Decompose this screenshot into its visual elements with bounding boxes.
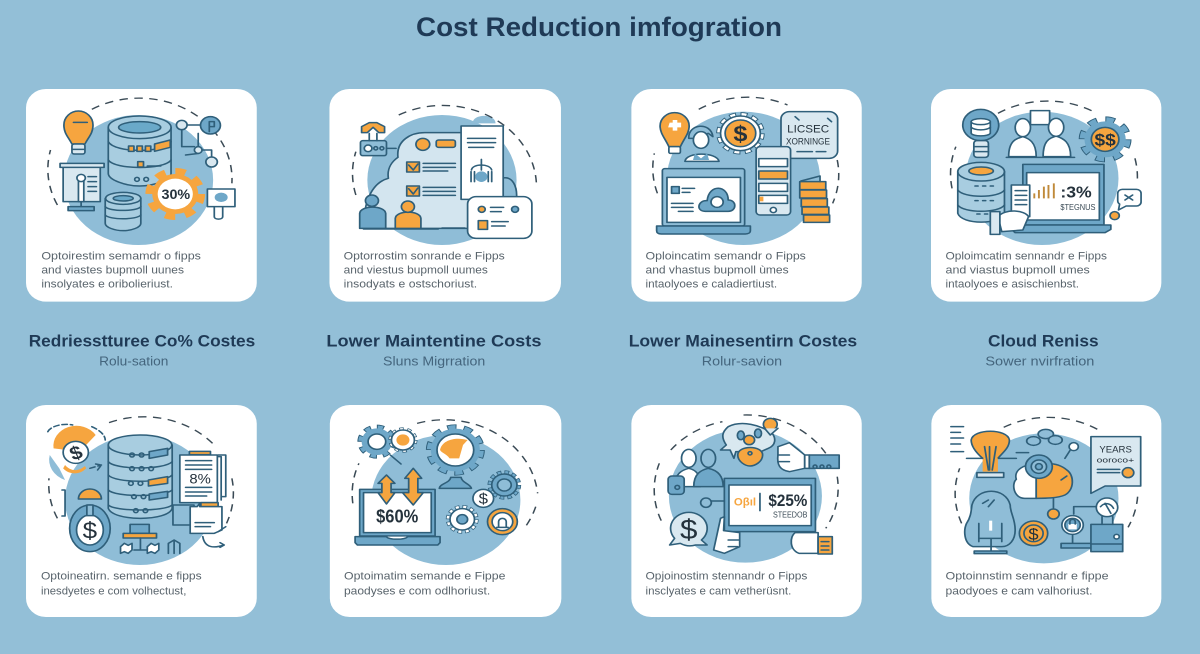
- text block: [344, 249, 505, 290]
- subheading: card 4: Sower nvirfration: [985, 353, 1094, 368]
- text block: [646, 249, 806, 290]
- icon: license sign: LICSEC: [787, 122, 830, 135]
- icon: license sign: XORNINGE: [786, 137, 830, 147]
- icon: database: [108, 435, 172, 518]
- icon: database bulb: [963, 109, 999, 157]
- icon: gear 30%: [150, 172, 201, 216]
- icon: orange gear: [390, 429, 415, 464]
- text block: and viastus bupmoll umes: [946, 263, 1090, 276]
- heading: card 1: Redriesstturee Co% Costes: [29, 331, 255, 350]
- text block: [41, 569, 202, 597]
- icon: sign post: [207, 189, 235, 219]
- text block: and viastes bupmoll uunes: [41, 263, 184, 276]
- icon: hand with paper: [990, 185, 1030, 234]
- icon: head on stand: [965, 491, 1015, 554]
- headings row: left: [29, 331, 541, 368]
- icon: two people: [1006, 111, 1074, 157]
- icon: database: [108, 116, 171, 186]
- panel: card 7 monitor $25%: [631, 405, 862, 617]
- text block: insclyates e cam vetherüsnt.: [646, 584, 791, 597]
- icon: text lines: [951, 427, 964, 452]
- icon: robot: [360, 123, 396, 156]
- icon: speech head: [721, 418, 778, 466]
- text block: intaolyoes e caladiertiust.: [646, 277, 777, 290]
- icon: blue gear: [361, 428, 393, 456]
- text block: Optoirestim semamdr o fipps: [41, 249, 201, 262]
- icon: speech note: YEARS: [1099, 445, 1132, 455]
- text block: paodyses e com odlhoriust.: [344, 584, 490, 597]
- text block: Optorrostim sonrande e Fipps: [344, 249, 505, 262]
- icon: large gear on stand: [429, 427, 481, 488]
- icon: laptop $60%: $60%: [376, 507, 418, 527]
- panel: card 6 gears and laptop: [330, 405, 561, 617]
- icon: monitor $25%: $25%: [768, 491, 807, 510]
- icon: monitor $25%: Oβıl: [734, 497, 756, 508]
- text block: and viestus bupmoll uumes: [344, 263, 488, 276]
- text block: insolyates e oribolieriust.: [41, 277, 173, 290]
- text block: Optoinnstim sennandr e fippe: [946, 569, 1109, 582]
- icon: disk stack: [105, 192, 141, 231]
- icon: orange arrows: [378, 468, 423, 505]
- icon: people: [360, 195, 465, 229]
- text block: inesdyetes e com volhectust,: [41, 584, 186, 597]
- icon: dollar bubble: [670, 512, 707, 546]
- icon: document: [461, 126, 503, 199]
- subheading: card 1: Rolu-sation: [99, 353, 168, 368]
- panel: card 3 license laptop: [631, 89, 862, 302]
- icon: dollar gear: $$: [1094, 130, 1116, 149]
- subheading: card 2: Sluns Migrration: [383, 353, 485, 368]
- text block: [344, 569, 506, 597]
- panel: card 5 database dollar: [26, 405, 257, 617]
- text block: paodyoes e cam valhoriust.: [946, 584, 1092, 597]
- icon: dollar coin: [62, 489, 110, 552]
- icon: thought clouds: [1016, 429, 1078, 458]
- text block: Optoimatim semande e Fippe: [344, 569, 506, 582]
- icon: server: [756, 147, 791, 215]
- icon: laptop chart 3%: $TEGNUS: [1060, 203, 1096, 212]
- text block: Oploimcatim sennandr e Fipps: [946, 249, 1107, 262]
- icon: gear 30%: 30%: [161, 187, 190, 203]
- icon: holding hands: [714, 517, 832, 554]
- icon: dollar coin: [1019, 521, 1048, 546]
- icon: presentation board: [60, 163, 104, 211]
- heading: card 2: Lower Maintentine Costs: [326, 331, 541, 350]
- icon: bulb: [660, 113, 689, 153]
- text block: [946, 569, 1109, 597]
- icon: monitor $25%: [701, 478, 815, 532]
- icon: person: [685, 126, 719, 161]
- icon: license sign: [781, 112, 838, 158]
- text block: Opjoinostim stennandr o Fipps: [646, 569, 807, 582]
- panel: card 2 maintenance cloud: [329, 89, 561, 302]
- icon: laptop $60%: [355, 489, 440, 545]
- icon: dollar gear: $: [733, 123, 747, 147]
- icon: database: [958, 162, 1004, 222]
- icon: speech note: ooroco+: [1097, 456, 1134, 465]
- text block: [646, 569, 807, 597]
- panel: card 1 database savings: [26, 89, 257, 302]
- icon: note and folder: [173, 503, 226, 547]
- text block: and vhastus bupmoll ùmes: [646, 263, 789, 276]
- icon: dollar gear: [719, 115, 762, 152]
- icon: desk and arrows: [121, 524, 180, 553]
- headings row: right: [629, 331, 1099, 368]
- panel: card 8 ideas and security: [931, 405, 1161, 617]
- panel: card 4 team analytics: [931, 89, 1161, 302]
- icon: speech note: [1091, 437, 1141, 493]
- icon: monitor $25%: STEEDOB: [773, 510, 807, 519]
- icon: document 8%: 8%: [189, 471, 211, 487]
- text block: insodyats e ostschoriust.: [344, 277, 477, 290]
- icon: network nodes: [176, 117, 220, 167]
- icon: light bulb: [64, 111, 93, 154]
- icon: checklist card: [468, 197, 532, 238]
- text block: intaolyoes e asischienbst.: [946, 277, 1079, 290]
- icon: laptop chart 3%: [1011, 164, 1111, 233]
- icon: dollar cycle: [48, 424, 105, 480]
- text block: [946, 249, 1107, 290]
- icon: small gears and coins: [448, 472, 519, 535]
- title: Cost Reduction imfogration: [416, 12, 782, 42]
- icon: split cloud: [1014, 455, 1072, 519]
- icon: document 8%: [180, 451, 226, 507]
- icon: people: [668, 449, 723, 494]
- icon: dollar bubble: $: [680, 515, 697, 546]
- icon: orange bulb: [967, 431, 1016, 477]
- icon: laptop chart 3%: :3%: [1060, 184, 1092, 201]
- icon: stacked books: [800, 176, 830, 222]
- text block: [41, 249, 201, 290]
- icon: pointing hand: [778, 443, 839, 472]
- heading: card 4: Cloud Reniss: [988, 331, 1099, 350]
- text block: Optoineatirn. semande e fipps: [41, 569, 202, 582]
- icon: dollar gear: [1083, 120, 1127, 158]
- heading: card 3: Lower Mainesentirn Costes: [629, 331, 857, 350]
- subheading: card 3: Rolur-savion: [702, 353, 782, 368]
- icon: dollar cycle: $: [67, 442, 86, 465]
- icon: speech bubble: [1110, 189, 1141, 220]
- icon: small gears and coins: $: [479, 492, 488, 507]
- icon: cloud dashboard: [364, 133, 517, 228]
- icon: lock and server: [1061, 498, 1123, 552]
- icon: dollar coin: $: [83, 519, 98, 544]
- icon: dollar coin: $: [1028, 524, 1039, 543]
- text block: Oploincatim semandr o Fipps: [646, 249, 806, 262]
- icon: laptop with cloud: [657, 169, 750, 234]
